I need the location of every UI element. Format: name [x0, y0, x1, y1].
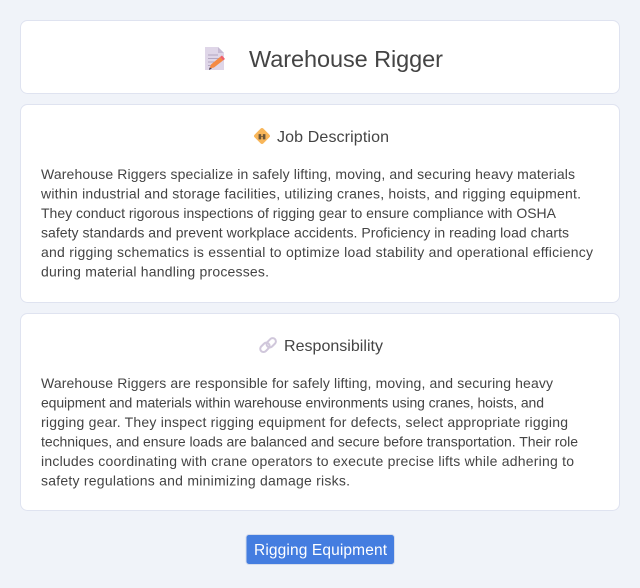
job description text: within industrial and storage facilities, utilizing cranes, hoists, and rigging equipment. — [40, 186, 581, 202]
job description text — [40, 166, 593, 280]
responsibility text — [41, 375, 578, 488]
heading: job description: Job Description — [277, 129, 389, 146]
responsibility text: rigging gear. They inspect rigging equipment for defects, select appropriate rigging — [41, 414, 568, 430]
icon: construction sign — [253, 127, 271, 145]
responsibility text: techniques, and ensure loads are balanced and secure before transportation. Their role — [41, 434, 578, 450]
responsibility text: equipment and materials within warehouse environments using cranes, hoists, and — [41, 394, 544, 410]
responsibility text: includes coordinating with crane operators to execute precise lifts while adhering to — [41, 453, 574, 469]
panel: title — [20, 20, 620, 94]
job description text: Warehouse Riggers specialize in safely lifting, moving, and securing heavy materials — [41, 166, 575, 182]
job description text: They conduct rigorous inspections of rigging gear to ensure compliance with OSHA — [41, 205, 557, 221]
job description text: safety standards and prevent workplace accidents. Proficiency in reading load charts — [41, 224, 569, 240]
icon: chain link — [259, 337, 277, 353]
button: rigging equipment: Rigging Equipment — [254, 542, 388, 559]
job description text: during material handling processes. — [41, 264, 269, 280]
responsibility text: safety regulations and minimizing damage risks. — [41, 472, 350, 488]
heading: responsibility: Responsibility — [284, 338, 383, 355]
button: rigging equipment — [246, 534, 394, 564]
title text: Warehouse Rigger — [249, 46, 443, 72]
panel: responsibility — [20, 314, 620, 510]
job description text: and rigging schematics is essential to optimize load stability and operational efficiency — [41, 244, 593, 260]
panel: job description — [20, 104, 620, 302]
icon: memo with pencil — [205, 47, 225, 70]
responsibility text: Warehouse Riggers are responsible for safely lifting, moving, and securing heavy — [41, 375, 553, 391]
